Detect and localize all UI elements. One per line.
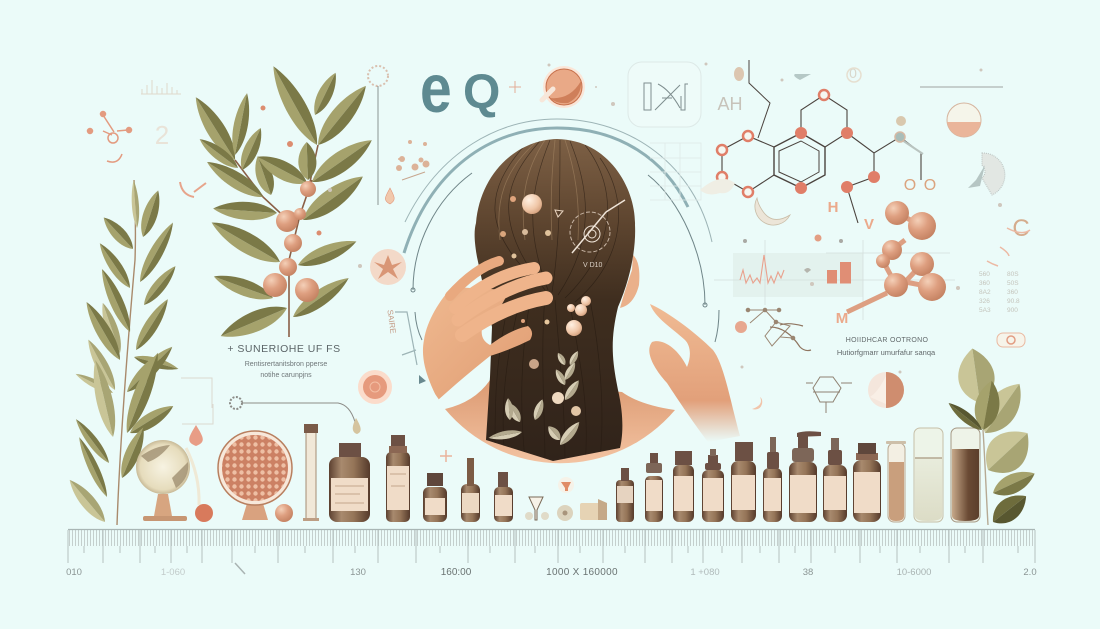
text block: left caption: notihe carunpjns <box>260 372 312 379</box>
data columns: 80S <box>1007 271 1019 278</box>
tube with copper liquid <box>886 441 906 522</box>
icon: rounded square emblem <box>628 62 701 127</box>
bottle 5 <box>494 472 513 522</box>
ruler labels: 1000 X 160000 <box>546 567 618 578</box>
plant: upper branch with berries <box>188 61 378 345</box>
icon: fan gauge <box>968 153 1005 195</box>
bottle 4 <box>461 458 480 522</box>
ruler labels: 38 <box>803 567 813 578</box>
text block: right caption: HOIIDHCAR OOTRONO <box>846 337 928 344</box>
ruler labels: 2.0 <box>1023 567 1037 578</box>
bottle 10 <box>731 442 756 522</box>
beaker with clear liquid <box>914 428 943 522</box>
ruler labels: 130 <box>350 567 366 578</box>
bottles: left group <box>329 435 513 522</box>
data columns: 90.8 <box>1007 298 1020 305</box>
bottle 13 <box>823 438 847 522</box>
faint grid <box>650 143 701 200</box>
neck and shoulders <box>445 380 675 463</box>
icon: hexagon molecule <box>806 377 852 413</box>
botanical motif on hair <box>488 350 583 448</box>
data columns: 900 <box>1007 307 1018 314</box>
left hand <box>423 287 532 400</box>
bottle 1 <box>329 443 370 522</box>
icon: drop <box>189 425 203 446</box>
title letters: Q <box>463 66 500 119</box>
icon: copper seal <box>542 66 585 108</box>
icon: half dome top right <box>947 103 981 137</box>
bottle 7 <box>645 453 663 522</box>
labels around structure: AH <box>717 94 743 114</box>
icon: half sphere <box>868 372 904 408</box>
bottle 9 <box>702 449 724 522</box>
molecule: copper blobs <box>847 201 946 312</box>
ruler labels: 160:00 <box>441 567 472 578</box>
soft smear behind structure <box>700 179 735 194</box>
icon: crescent under structure <box>755 198 790 225</box>
text block: right caption: Hutiorfgmarr umurfafur sanqa <box>837 348 936 357</box>
hair strands <box>495 140 619 465</box>
bottle 12 pump <box>789 431 821 522</box>
icon: small crescent and faint camera <box>752 333 1025 409</box>
hair <box>475 139 635 461</box>
bottle 3 <box>423 473 447 522</box>
icon: molecule top left <box>88 112 132 162</box>
icon: globe <box>136 440 199 521</box>
bottle 2 <box>386 435 410 522</box>
hair highlights <box>499 140 578 240</box>
icon: small molecule network <box>746 308 811 351</box>
text block: right caption <box>837 337 936 357</box>
fingers <box>450 261 546 335</box>
icon: coral swooshes <box>180 182 206 197</box>
emblem on hair: V D10 <box>583 262 603 269</box>
labels around structure: 0 <box>849 65 857 81</box>
chart panel <box>714 234 955 320</box>
small vertical label: SAIRE <box>385 309 398 334</box>
icon: particle cluster <box>396 140 430 180</box>
ruler labels: 10-6000 <box>897 567 931 578</box>
data columns: 360 <box>979 280 990 287</box>
labels around structure: O <box>904 177 916 194</box>
icon: coral dot with ring <box>735 321 747 333</box>
icon: test tube <box>303 424 319 521</box>
plant: tall left branch <box>64 180 180 527</box>
top right small icons <box>734 67 1003 126</box>
data columns: 50S <box>1007 280 1019 287</box>
bottle 6 <box>616 468 634 522</box>
plus mark <box>440 450 452 462</box>
chemical structure <box>717 60 923 223</box>
beaker with brown liquid <box>951 428 980 522</box>
title letters: e <box>420 51 452 127</box>
data columns <box>979 271 1020 314</box>
emblem on hair <box>570 200 625 269</box>
pearls and particles in hair <box>500 194 591 336</box>
icon: coral ball <box>195 504 213 522</box>
text block: left caption: + SUNERIOHE UF FS <box>227 343 341 355</box>
ruler labels: 1-060 <box>161 567 185 578</box>
data columns: 360 <box>1007 289 1018 296</box>
ruler labels <box>66 567 1037 578</box>
plant: right leaves <box>945 346 1041 531</box>
scattered dots <box>328 62 1002 374</box>
labels around structure: H <box>828 199 838 216</box>
ruler <box>66 530 1037 578</box>
faint number and sparkline: 2 <box>155 120 169 150</box>
labels around structure: M <box>836 310 848 327</box>
faint number and sparkline <box>141 80 213 424</box>
plus mark top <box>509 81 521 93</box>
icon: pipette line <box>230 397 361 434</box>
head illustration <box>423 139 740 465</box>
labels around structure: C <box>1012 215 1030 242</box>
labels around structure: O <box>924 177 936 194</box>
data columns: 560 <box>979 271 990 278</box>
icon: pendant line and flower <box>358 66 406 404</box>
title letters <box>420 51 500 127</box>
bottle 11 <box>763 437 782 522</box>
ear <box>620 255 639 308</box>
data columns: 8A2 <box>979 289 991 296</box>
labels around structure <box>717 65 1030 327</box>
filled nodes <box>795 127 880 194</box>
ruler labels: 010 <box>66 567 82 578</box>
data columns: 5A3 <box>979 307 991 314</box>
data columns: 326 <box>979 298 990 305</box>
berries <box>260 106 322 302</box>
ruler labels: 1 +080 <box>690 567 720 578</box>
text block: left caption: Rentisrertanitsbron pperse <box>245 361 327 368</box>
labels around structure: V <box>864 216 874 233</box>
icon: curved marks <box>987 228 1030 266</box>
small icons: funnel, medallion and block <box>525 477 607 521</box>
bottle 14 <box>853 443 881 522</box>
icon: copper disc <box>218 431 293 522</box>
ring nodes <box>717 90 829 197</box>
bottle 8 <box>673 451 694 522</box>
text block: left caption <box>227 343 341 379</box>
right hand <box>649 304 740 442</box>
bottles: right group <box>616 428 980 522</box>
arcs around the head <box>395 119 719 384</box>
